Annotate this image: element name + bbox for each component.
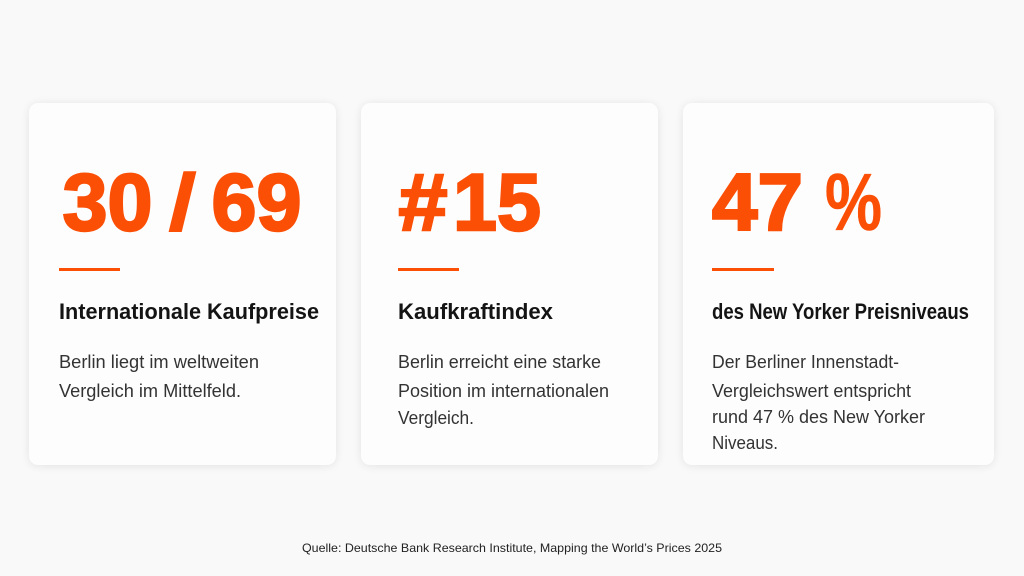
- body text: Niveaus.: [712, 433, 778, 453]
- body text: Berlin liegt im weltweiten: [59, 352, 259, 372]
- big number: 47 %: 47: [712, 158, 803, 248]
- source note: Quelle: Deutsche Bank Research Institute, Mapping the World’s Prices 2025: [302, 541, 722, 555]
- heading: Kaufkraftindex: [398, 299, 554, 324]
- body text: Vergleich im Mittelfeld.: [59, 381, 241, 401]
- big number: 47 %: %: [825, 158, 882, 248]
- big number: 30 / 69: 69: [212, 158, 302, 248]
- panel: card 3 background: [683, 103, 994, 465]
- body text: rund 47 % des New Yorker: [712, 407, 925, 427]
- body text: Berlin erreicht eine starke: [398, 352, 601, 372]
- accent rule: [59, 268, 120, 271]
- body text: Vergleich.: [398, 408, 474, 428]
- big number: 30 / 69: /: [168, 158, 197, 248]
- body text: [398, 352, 609, 428]
- panel: des New Yorker Preisniveaus: [712, 158, 969, 453]
- panel: card 1 background: [29, 103, 336, 465]
- heading: Internationale Kaufpreise: [59, 299, 319, 324]
- body text: [59, 352, 259, 401]
- body text: Vergleichswert entspricht: [712, 381, 911, 401]
- accent rule: [398, 268, 459, 271]
- accent rule: [712, 268, 774, 271]
- body text: [712, 352, 925, 453]
- big number: 30 / 69: 30: [62, 158, 152, 248]
- big number: #15: #: [398, 158, 448, 248]
- panel: card 2 background: [361, 103, 658, 465]
- panel: Internationale Kaufpreise: [59, 158, 319, 401]
- panel: Kaufkraftindex: [398, 158, 609, 428]
- body text: Position im internationalen: [398, 381, 609, 401]
- heading: des New Yorker Preisniveaus: [712, 299, 969, 324]
- big number: #15: 15: [453, 158, 541, 248]
- body text: Der Berliner Innenstadt-: [712, 352, 899, 372]
